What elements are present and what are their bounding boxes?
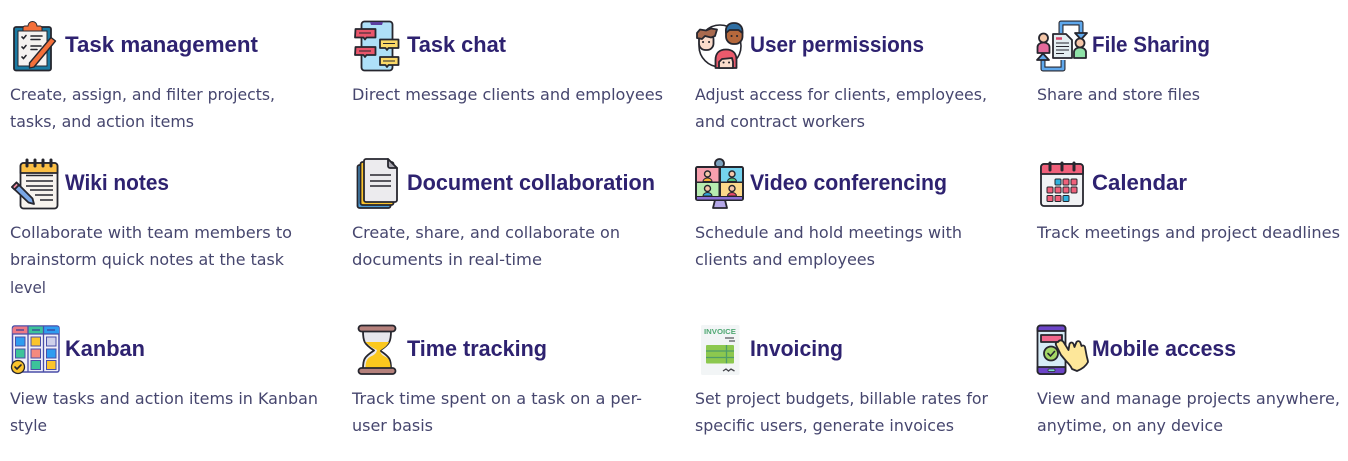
description: View tasks and action items in Kanban (10, 389, 318, 408)
description: documents in real-time (352, 250, 542, 269)
description: Track meetings and project deadlines (1036, 223, 1340, 242)
panel: document collaboration (352, 159, 655, 269)
description: style (10, 416, 47, 435)
description: Set project budgets, billable rates for (695, 389, 988, 408)
icon: monitor with video call grid (695, 159, 744, 208)
panel: invoicing (695, 325, 988, 435)
heading: File Sharing (1092, 32, 1210, 57)
panel: task management (10, 22, 275, 131)
panel: wiki notes (10, 160, 292, 297)
icon: hourglass (358, 326, 396, 374)
heading: Calendar (1092, 170, 1187, 195)
description: View and manage projects anywhere, (1037, 389, 1340, 408)
icon: calendar (1041, 163, 1083, 206)
description (1037, 389, 1340, 435)
description (10, 85, 275, 131)
description: level (10, 278, 46, 297)
panel: file sharing (1037, 23, 1210, 104)
description: Share and store files (1037, 85, 1200, 104)
panel: kanban (10, 326, 318, 435)
icon: document exchanged between two people (1037, 23, 1087, 69)
icon: phone with chat bubbles (355, 22, 398, 70)
description: Collaborate with team members to (10, 223, 292, 242)
panel: calendar (1036, 163, 1340, 242)
heading: Kanban (65, 336, 145, 361)
heading: User permissions (750, 32, 924, 57)
icon: kanban board (12, 326, 59, 374)
description: user basis (352, 416, 433, 435)
icon: notebook and pencil (12, 160, 58, 208)
description: clients and employees (695, 250, 875, 269)
panel: mobile access (1037, 326, 1340, 435)
description: Direct message clients and employees (352, 85, 663, 104)
description: Create, share, and collaborate on (352, 223, 620, 242)
panel: user permissions (695, 23, 987, 131)
description: anytime, on any device (1037, 416, 1223, 435)
heading: Invoicing (750, 336, 843, 361)
heading: Document collaboration (407, 170, 655, 195)
description: and contract workers (695, 112, 865, 131)
description: Create, assign, and filter projects, (10, 85, 275, 104)
heading: Mobile access (1092, 336, 1236, 361)
description (10, 389, 318, 435)
description: brainstorm quick notes at the task (10, 250, 285, 269)
icon: clipboard and pencil (14, 22, 56, 70)
description (695, 223, 962, 269)
description: Track time spent on a task on a per- (351, 389, 642, 408)
description: tasks, and action items (10, 112, 194, 131)
heading: Time tracking (407, 336, 547, 361)
description (352, 223, 620, 269)
heading: Task chat (407, 32, 507, 57)
invoice label: INVOICE (704, 327, 736, 336)
panel: time tracking (351, 326, 642, 435)
description (695, 389, 988, 435)
heading: Task management (65, 32, 259, 57)
heading: Wiki notes (65, 170, 169, 195)
heading: Video conferencing (750, 170, 947, 195)
description: Adjust access for clients, employees, (695, 85, 987, 104)
description: Schedule and hold meetings with (695, 223, 962, 242)
icon: invoice sheet (701, 325, 740, 375)
icon: three user faces in a ring (697, 23, 743, 68)
icon: stacked documents (358, 159, 397, 208)
description (695, 85, 987, 131)
description: specific users, generate invoices (695, 416, 954, 435)
description (351, 389, 642, 435)
description (10, 223, 292, 297)
icon: phone with tapping hand (1038, 326, 1088, 374)
panel: task chat (352, 22, 663, 104)
panel: video conferencing (695, 159, 962, 269)
